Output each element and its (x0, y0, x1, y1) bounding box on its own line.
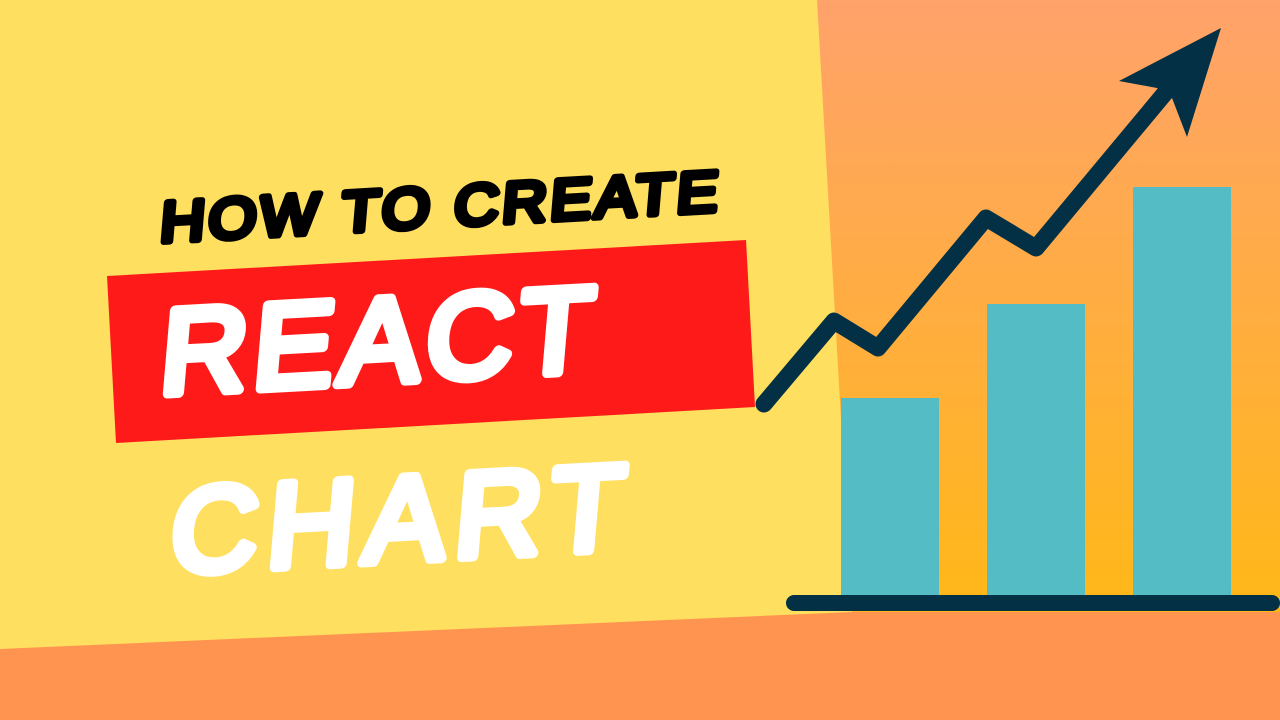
chart baseline (794, 595, 1272, 611)
banner: red react (107, 240, 755, 443)
heading: react: REACT (156, 262, 599, 420)
arrow: upward trend (764, 28, 1221, 404)
panel: orange gradient background (800, 0, 1280, 615)
bar 3 (1133, 187, 1231, 598)
bar chart (841, 187, 1231, 598)
bar 2 (987, 304, 1085, 598)
heading: chart: CHART (166, 440, 630, 599)
bar 1 (841, 398, 939, 598)
panel: yellow slanted area (0, 0, 852, 649)
panel: bottom orange band (0, 612, 1280, 720)
heading: how to create: HOW TO CREATE (158, 160, 721, 255)
